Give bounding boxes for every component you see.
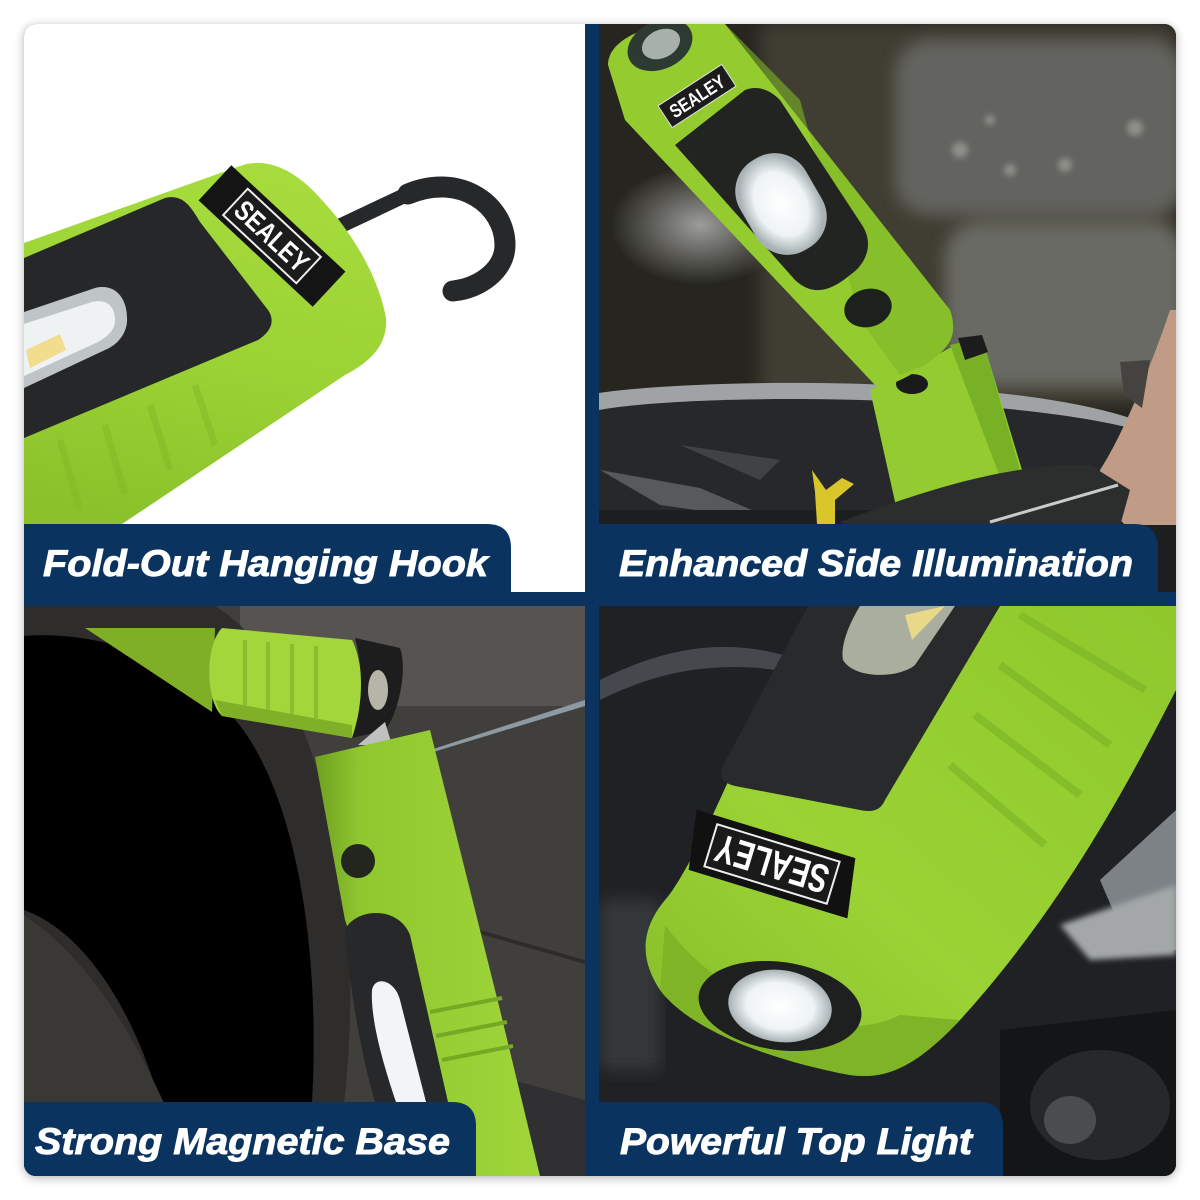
yellow clip xyxy=(812,470,854,524)
label tab: Powerful Top Light: Powerful Top Light xyxy=(620,1121,974,1162)
label: SEALEY badge: SEALEY xyxy=(228,194,315,279)
rotating head xyxy=(209,628,362,738)
black plate xyxy=(721,606,1000,811)
side LED xyxy=(735,153,827,255)
label: SEALEY badge xyxy=(199,165,345,307)
button xyxy=(844,288,892,328)
label tab: Strong Magnetic Base: Strong Magnetic Base xyxy=(35,1121,450,1162)
label tab: Enhanced Side Illumination xyxy=(585,524,1158,592)
grip ribs xyxy=(102,384,218,460)
label tab: Fold-Out Hanging Hook xyxy=(24,524,511,592)
grip ribs xyxy=(950,615,1145,845)
green arm xyxy=(85,628,215,712)
panel: strong magnetic base xyxy=(24,606,585,1176)
LED window xyxy=(24,287,127,388)
upper lamp body xyxy=(608,21,953,386)
label tab: Enhanced Side Illumination: Enhanced Side Illumination xyxy=(619,543,1133,584)
lamp body xyxy=(646,606,1176,1076)
lower grip xyxy=(870,348,1022,502)
panel: enhanced side illumination xyxy=(585,9,1185,592)
LED xyxy=(723,963,837,1049)
lamp body xyxy=(24,163,386,524)
label tab: Powerful Top Light xyxy=(585,1102,1003,1176)
black plate xyxy=(345,913,448,1102)
LED xyxy=(372,981,426,1102)
tyres background xyxy=(895,40,1185,387)
icon: black hook xyxy=(340,187,505,291)
SEALEY badge: SEALEY xyxy=(666,71,730,123)
panel: powerful top light xyxy=(585,606,1176,1176)
tool xyxy=(840,470,1130,524)
top LED xyxy=(628,24,692,72)
dark ring xyxy=(693,951,867,1061)
main body xyxy=(315,730,540,1176)
light haze xyxy=(616,172,760,281)
label tab: Strong Magnetic Base xyxy=(24,1102,476,1176)
hinge ring xyxy=(352,638,403,738)
button xyxy=(341,844,375,878)
hand xyxy=(1100,310,1176,525)
black wheel arch xyxy=(24,635,314,1102)
black plate xyxy=(675,88,868,290)
panel: fold-out hanging hook xyxy=(24,24,585,592)
car bonnet xyxy=(599,399,1124,510)
hinge xyxy=(896,374,928,394)
label tab: Fold-Out Hanging Hook: Fold-Out Hanging Hook xyxy=(43,543,491,584)
LED chips xyxy=(26,334,66,368)
LED window xyxy=(842,606,955,675)
background parts xyxy=(1100,810,1176,950)
tyre xyxy=(24,606,350,1176)
engine bay lower xyxy=(599,510,1176,592)
SEALEY badge: SEALEY xyxy=(710,825,834,901)
tyre speckles xyxy=(952,115,1143,176)
black face plate xyxy=(24,197,272,438)
SEALEY badge xyxy=(679,810,865,918)
